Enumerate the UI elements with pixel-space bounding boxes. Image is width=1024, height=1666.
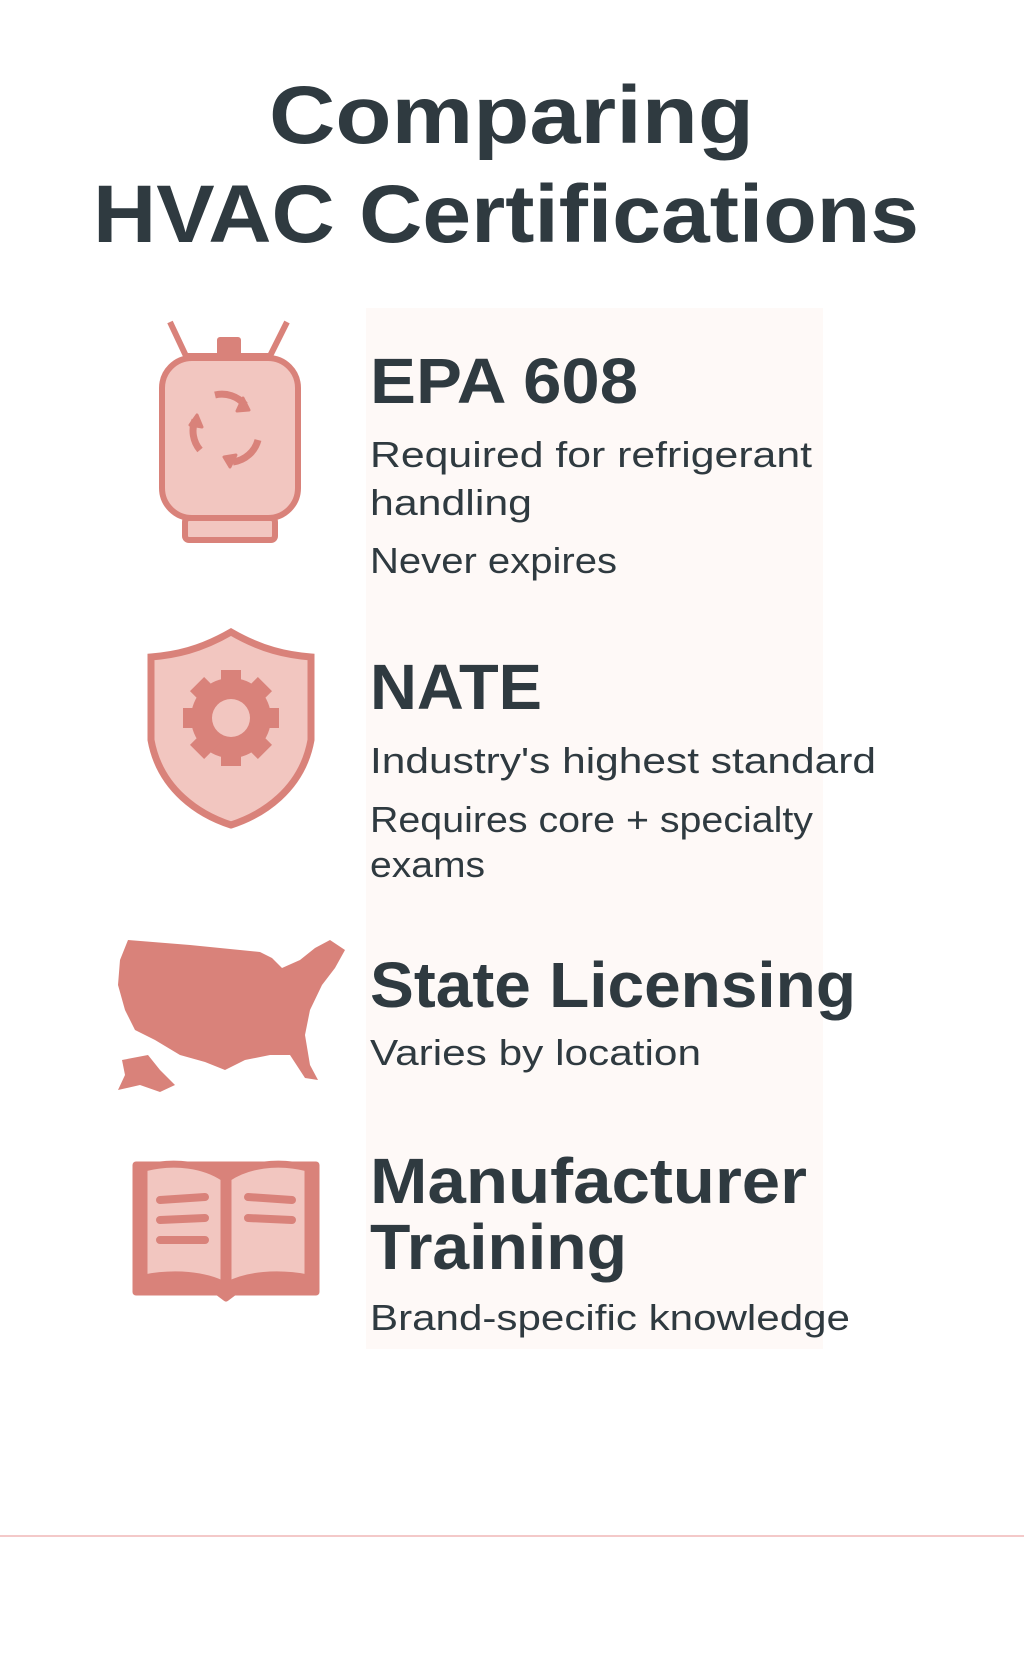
panel: NATE [370, 651, 876, 885]
panel: NATE: Industry's highest standard [370, 740, 876, 781]
icon: shield with gear [151, 632, 311, 825]
panel: EPA 608: handling [370, 482, 532, 523]
panel: NATE: Requires core + specialty [370, 799, 813, 840]
panel: NATE: NATE [370, 651, 542, 723]
panel: Manufacturer Training: Brand-specific knowledge [370, 1297, 850, 1338]
panel: EPA 608 [370, 345, 812, 581]
panel: EPA 608: Required for refrigerant [370, 434, 812, 475]
panel: State Licensing: Varies by location [370, 1032, 701, 1073]
panel: EPA 608: EPA 608 [370, 345, 638, 417]
panel: Manufacturer Training [370, 1145, 850, 1338]
title: HVAC Certifications [93, 169, 919, 260]
panel: State Licensing: State Licensing [370, 949, 856, 1021]
panel: Manufacturer Training: Manufacturer [370, 1145, 807, 1217]
icon: USA map [118, 940, 345, 1092]
panel: EPA 608: Never expires [370, 540, 617, 581]
title: Comparing [269, 70, 754, 161]
icon: open book [136, 1164, 316, 1298]
title [93, 70, 919, 260]
panel: State Licensing [370, 949, 856, 1073]
icon: refrigerant tank [162, 322, 298, 540]
panel: NATE: exams [370, 844, 485, 885]
panel: Manufacturer Training: Training [370, 1211, 627, 1283]
